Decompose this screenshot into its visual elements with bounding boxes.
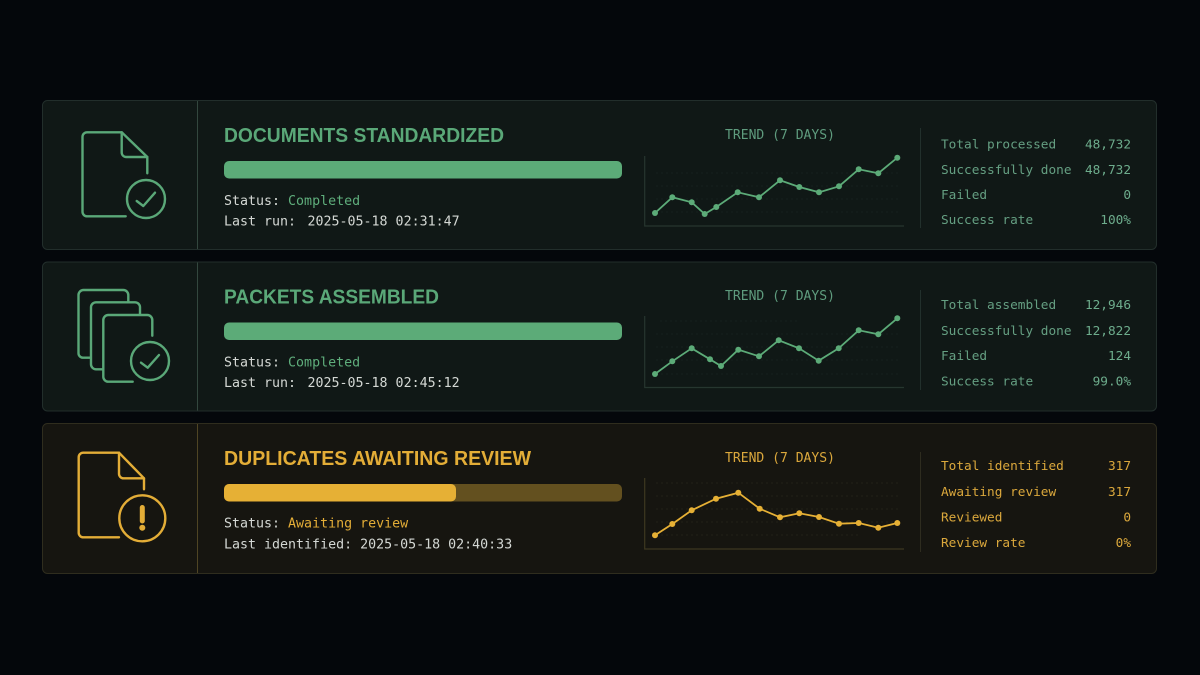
status text [224,516,512,552]
status text: 2025-05-18 02:45:12 [308,376,460,391]
stats table: Reviewed [941,510,1002,526]
panel: documents standardized [42,100,1156,250]
status text: Status: Awaiting review [224,516,408,532]
stats table: 48,732 [1085,163,1131,178]
stats table: Total assembled [941,298,1056,313]
status text [224,194,460,230]
panel: duplicates awaiting review [42,424,1156,574]
status text: Last run: [224,376,296,391]
stats table [941,298,1131,390]
stats table: 0 [1123,510,1131,526]
panel: packets assembled [42,262,1156,411]
icon: stacked documents with check [78,290,169,382]
stats table: 12,822 [1085,324,1131,339]
trend label: TREND (7 DAYS) [725,451,835,466]
progress bar [224,161,622,178]
stats table: 100% [1100,213,1131,228]
stats table: Success rate [941,213,1033,228]
line chart: trend [645,478,904,549]
heading: duplicates awaiting review: DUPLICATES AWAITING REVIEW [224,448,532,470]
status text: Status: Completed [224,356,360,370]
stats table: Successfully done [941,163,1072,178]
stats table: Successfully done [941,324,1072,339]
line chart: trend [645,155,904,226]
stats table: Success rate [941,374,1033,390]
stats table: Total identified [941,459,1064,474]
icon: document with check [82,132,165,218]
heading: documents standardized: DOCUMENTS STANDARDIZED [224,125,504,147]
progress bar [224,484,622,502]
stats table: Failed [941,188,987,203]
stats table: 0 [1123,188,1131,203]
stats table: 99.0% [1093,374,1131,390]
status text: Last identified: 2025-05-18 02:40:33 [224,538,512,552]
stats table: 0% [1116,536,1131,551]
stats table: 12,946 [1085,298,1131,313]
stats table: 317 [1108,485,1131,500]
line chart: trend [645,315,904,388]
trend label: TREND (7 DAYS) [725,289,835,304]
heading: packets assembled: PACKETS ASSEMBLED [224,286,439,308]
stats table: 317 [1108,459,1131,474]
status text: Last run: [224,214,296,230]
stats table: 48,732 [1085,138,1131,152]
stats table: 124 [1108,349,1131,364]
stats table: Total processed [941,138,1056,152]
icon: document with warning [79,453,165,541]
stats table: Review rate [941,536,1025,551]
status text: Status: Completed [224,194,360,209]
progress bar [224,322,622,340]
status text: 2025-05-18 02:31:47 [308,214,460,230]
stats table [941,138,1131,228]
status text [224,356,460,391]
stats table: Failed [941,349,987,364]
stats table [941,459,1131,551]
stats table: Awaiting review [941,485,1056,500]
trend label: TREND (7 DAYS) [725,128,835,143]
